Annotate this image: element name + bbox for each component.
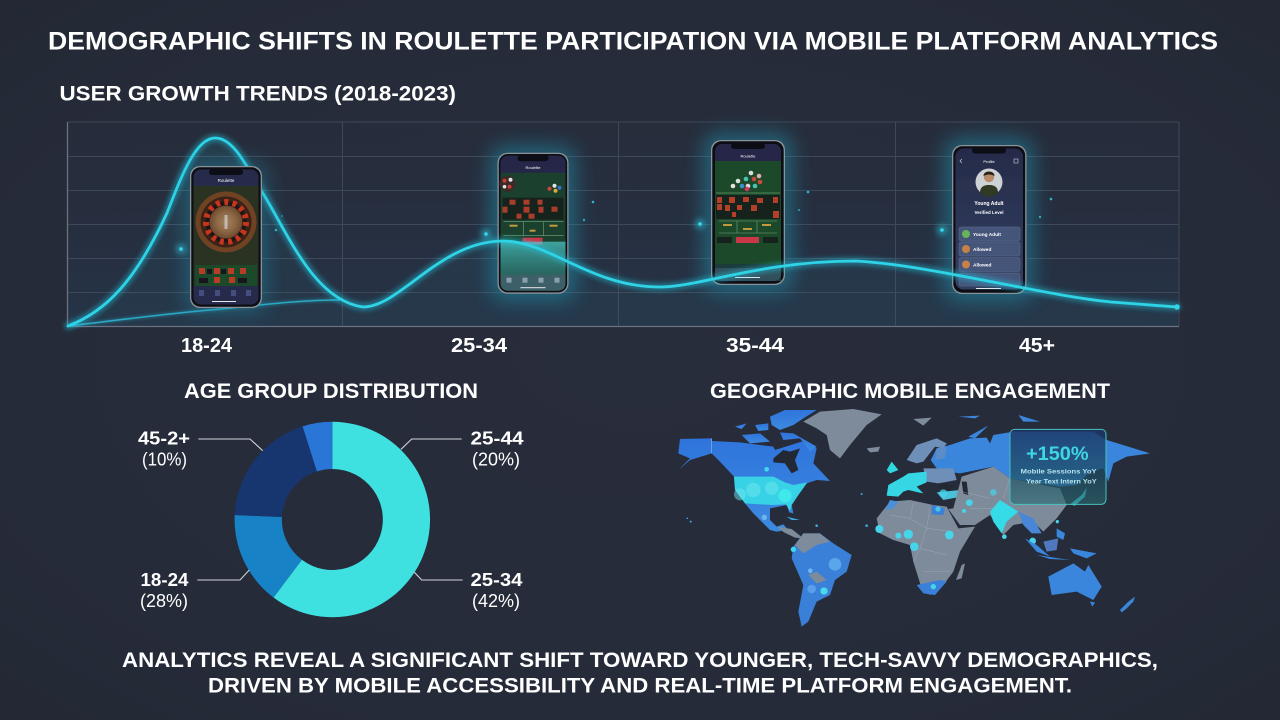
south america [792,533,852,627]
caribbean and pacific islands [686,493,868,527]
callout: +150%: Mobile Sessions YoY [1021,468,1097,475]
label: 18-24: 18-24 [140,570,188,590]
donut segment: remainder [303,422,332,471]
label: 45-2+: 45-2+ [138,428,190,448]
x-axis labels: 25-34 [451,335,508,357]
phone: profile screen, age 45+ [945,138,1033,301]
label: 25-34: (42%) [472,591,520,611]
label: 18-24 [140,570,188,611]
usa highlight [734,477,807,511]
phone: roulette wheel screen, age 18-24 [186,162,266,312]
callout: +150%: +150% [1026,444,1089,465]
greenland [803,409,882,458]
conclusion text: DRIVEN BY MOBILE ACCESSIBILITY AND REAL-TIME PLATFORM ENGAGEMENT. [208,674,1072,698]
label: 25-44: 25-44 [470,428,524,448]
x-axis labels: 35-44 [726,335,785,357]
phone: profile screen, age 45+: Verified Level [974,210,1004,215]
callout: +150% [1010,429,1106,504]
label: 18-24: (28%) [140,591,188,611]
donut segment: 18-24 [235,515,302,598]
roulette wheel [196,192,256,252]
japan [1070,488,1087,506]
phone: screen with card table, age 25-34 [490,146,576,301]
central america [777,527,803,538]
secondary trend line [68,300,340,326]
x-axis labels: 45+ [1019,335,1055,357]
africa [877,500,975,595]
heading: age group distribution: AGE GROUP DISTRIBUTION [184,380,478,403]
x-axis labels: 18-24 [181,335,233,357]
madagascar [956,563,965,580]
main growth curve [68,138,1177,326]
area glow beneath curve [68,138,1177,326]
label: 25-44: (20%) [472,450,520,470]
australia [1048,563,1102,600]
panel: donut chart [138,422,524,617]
label: 45-2+ [138,428,190,470]
x-axis labels [181,335,1055,357]
north america [678,410,830,532]
conclusion text [122,649,1158,698]
southeast asia islands [1025,528,1097,560]
hudson bay [773,448,800,473]
donut segment: 45+ [235,426,317,517]
phone: profile screen, age 45+: Allowed [973,262,991,268]
glowing particles [177,191,1052,253]
heading: user growth trends: USER GROWTH TRENDS (2018-2023) [60,82,456,106]
conclusion text: ANALYTICS REVEAL A SIGNIFICANT SHIFT TOWARD YOUNGER, TECH-SAVVY DEMOGRAPHICS, [122,649,1158,672]
india [990,500,1018,533]
leader lines [197,439,463,580]
phone: profile screen, age 45+: Young Adult [974,201,1004,207]
russia and northern asia [931,432,1150,487]
phone: roulette wheel screen, age 18-24: Roulette [218,178,235,183]
phone: screen with card table, age 25-34: Roulette [526,165,541,170]
heading: geographic mobile engagement: GEOGRAPHIC MOBILE ENGAGEMENT [710,380,1110,403]
label: 25-34: 25-34 [470,570,522,590]
new zealand [1120,597,1135,612]
panel: world map [678,409,1150,627]
phone: profile screen, age 45+: Young Adult [973,232,1001,238]
europe [887,438,962,500]
phone: screen with chip pile, age 35-44 [704,133,792,292]
curve end point [1174,304,1180,310]
title: DEMOGRAPHIC SHIFTS IN ROULETTE PARTICIPATION VIA MOBILE PLATFORM ANALYTICS [48,28,1218,56]
phone: screen with chip pile, age 35-44: Roulette [741,154,756,158]
phone: profile screen, age 45+: Profile [983,159,995,164]
donut segment: 25-34 [274,422,430,617]
phone: profile screen, age 45+: Allowed [973,247,991,253]
label: 25-44 [470,428,524,470]
asia [948,467,1067,535]
panel: line chart with phones [68,122,1180,357]
callout: +150%: Year Text Intern YoY [1026,478,1097,485]
label: 25-34 [470,570,522,611]
label: 45-2+: (10%) [142,450,187,470]
